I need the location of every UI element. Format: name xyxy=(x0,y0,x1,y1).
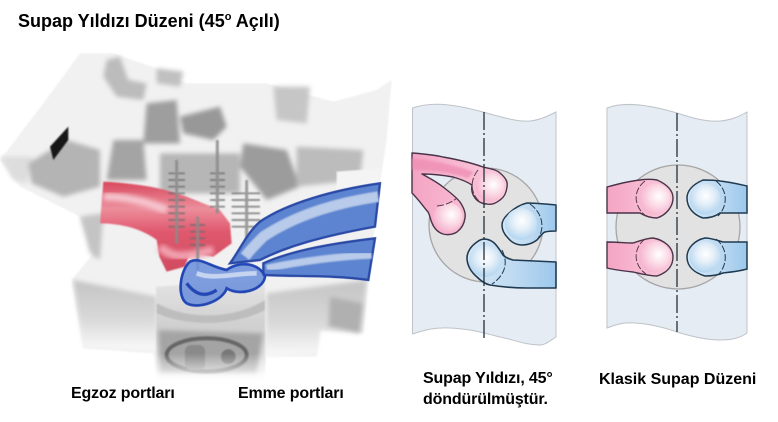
centre line xyxy=(676,113,678,332)
cylinder and piston xyxy=(80,280,280,383)
combustion chamber circle xyxy=(616,165,740,289)
label: rotated valve star xyxy=(423,370,553,408)
centre line xyxy=(483,112,485,338)
label: classic valve layout: Klasik Supap Düzeni xyxy=(599,371,756,388)
diagram: classic valve layout xyxy=(607,104,747,340)
intake ports (blue) xyxy=(181,183,380,305)
engine block xyxy=(0,53,392,380)
label: exhaust ports: Egzoz portları xyxy=(71,385,175,402)
title: Supap Yıldızı Düzeni (45o Açılı) xyxy=(18,11,280,31)
panel background xyxy=(607,104,747,340)
exhaust ports (pink) xyxy=(412,153,507,235)
label: rotated valve star: döndürülmüştür. xyxy=(423,391,548,408)
label: rotated valve star: Supap Yıldızı, 45° xyxy=(423,370,553,387)
valve springs xyxy=(168,140,260,270)
exhaust ports (pink) xyxy=(607,179,673,276)
block shading xyxy=(0,57,367,357)
exhaust port (red) xyxy=(100,182,232,272)
label: intake ports: Emme portları xyxy=(238,385,344,402)
engine cutaway illustration xyxy=(0,53,392,383)
intake ports (blue) xyxy=(467,203,556,288)
intake ports (blue) xyxy=(687,180,747,276)
diagram: 45 degree rotated valve star xyxy=(412,104,556,345)
oil gallery hole xyxy=(50,127,68,160)
combustion chamber circle xyxy=(429,168,543,282)
panel background xyxy=(412,104,556,345)
